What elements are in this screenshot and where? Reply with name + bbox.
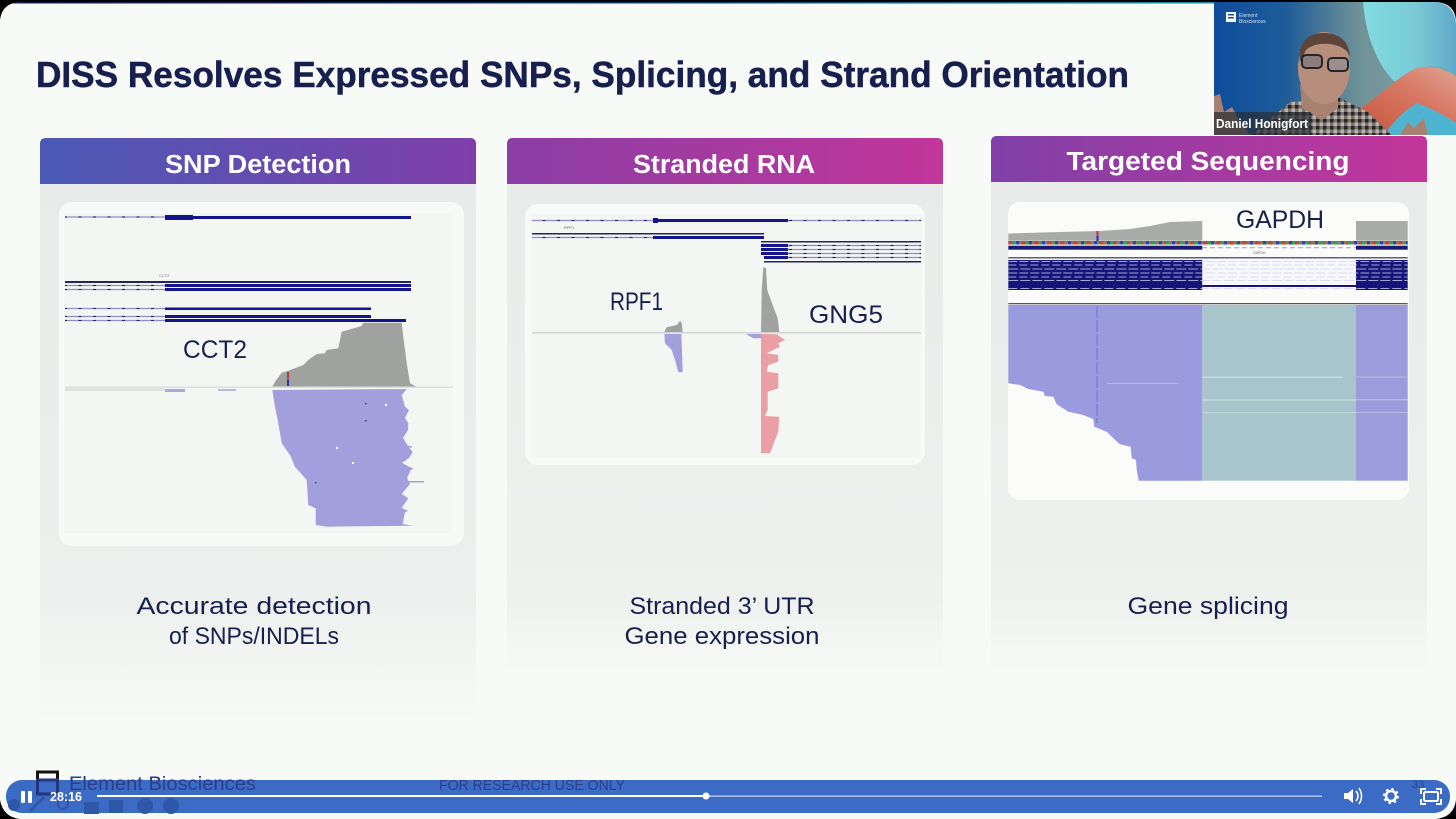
slide ghost content through the bar: [8, 773, 1424, 814]
caption: SNP Detection: Accurate detection: [136, 593, 372, 620]
pause button: [21, 791, 32, 803]
backdrop shapes: [1358, 2, 1456, 135]
header: Stranded RNA: [507, 138, 943, 184]
read pileups: [664, 334, 785, 453]
progress track: [97, 792, 1322, 800]
title: DISS Resolves Expressed SNPs, Splicing, and Strand Orientation: [36, 54, 1129, 95]
caption: SNP Detection: of SNPs/INDELs: [169, 623, 339, 650]
header: Targeted Sequencing: [991, 136, 1427, 182]
elapsed time: 28:16: [50, 790, 82, 804]
name tag: [1214, 112, 1311, 135]
brand mark: [1226, 12, 1266, 23]
panel: Stranded RNA: [507, 138, 943, 668]
presenter: [1214, 32, 1428, 135]
caption: Targeted Sequencing: Gene splicing: [1128, 593, 1288, 620]
webcam: presenter video: [1214, 2, 1456, 135]
gene label: RPF1: RPF1: [610, 288, 663, 316]
slide ghost content through the bar: 33: [1412, 779, 1424, 791]
icon: settings: [1384, 789, 1398, 803]
gene label: GNG5: GNG5: [809, 301, 883, 329]
caption: Stranded RNA: [624, 593, 820, 650]
slide ghost content through the bar: FOR RESEARCH USE ONLY: [439, 778, 625, 794]
gene label: GAPDH: GAPDH: [1236, 206, 1324, 234]
IGV screenshot: RPF1 and GNG5: [525, 204, 925, 465]
gene tracks: RPF1: [564, 225, 575, 230]
panel: SNP Detection: [40, 138, 476, 644]
icon: fullscreen: [1421, 789, 1441, 804]
gene tracks: GAPDH: [1253, 251, 1266, 255]
coverage track: [1008, 221, 1408, 241]
brand mark: Biosciences: [1239, 19, 1266, 25]
slide ghost content through the bar: Element Biosciences: [69, 773, 256, 795]
read pileup: [272, 389, 424, 527]
caption: SNP Detection: [136, 596, 370, 644]
caption: Stranded RNA: Stranded 3’ UTR: [630, 593, 814, 620]
icon: volume: [1344, 788, 1362, 804]
header: SNP Detection: [40, 138, 476, 184]
IGV screenshot: GAPDH: [1008, 202, 1409, 500]
brand mark: Element: [1239, 13, 1258, 19]
header: SNP Detection: SNP Detection: [165, 151, 351, 179]
header: Targeted Sequencing: Targeted Sequencing: [1066, 148, 1350, 176]
panel: Targeted Sequencing: [991, 136, 1427, 666]
footer logo and labels: FOR RESEARCH USE ONLY: [439, 778, 625, 794]
gene label: CCT2: CCT2: [183, 336, 247, 364]
gene tracks: CCT2: [159, 273, 170, 278]
header: Stranded RNA: Stranded RNA: [633, 151, 815, 179]
footer logo and labels: Element Biosciences: [69, 773, 256, 795]
gene tracks: [65, 215, 411, 322]
reference sequence row: [1008, 241, 1408, 244]
gene tracks: [532, 218, 921, 262]
video player control bar: [6, 773, 1450, 814]
coverage track: [532, 267, 921, 334]
caption: Stranded RNA: Gene expression: [624, 623, 820, 650]
coverage track: [65, 323, 453, 392]
name tag: Daniel Honigfort: [1216, 117, 1309, 131]
gene tracks: [1008, 246, 1408, 290]
IGV screenshot: CCT2: [59, 202, 464, 546]
read pileup: [1008, 303, 1408, 481]
footer logo and labels: [36, 770, 254, 780]
